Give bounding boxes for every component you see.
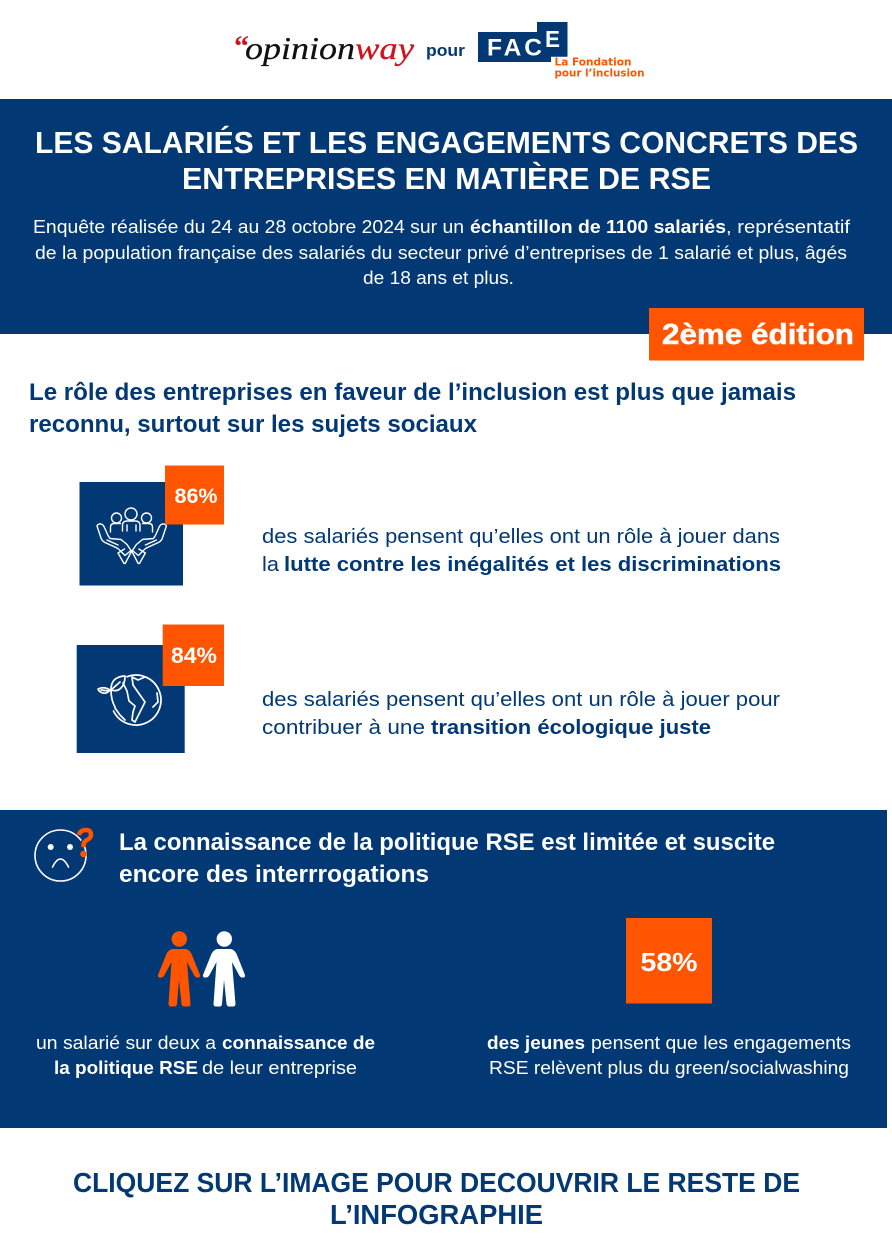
title: LES SALARIÉS ET LES ENGAGEMENTS CONCRETS DES	[35, 125, 858, 160]
text block: survey method: de la population française des salariés du secteur privé d’entreprises de 1 salarié et plus, âgés	[35, 242, 847, 263]
badge: 2ème édition: 2ème édition	[662, 319, 854, 351]
text block: one in two employees: connaissance de	[222, 1032, 375, 1053]
title: ENTREPRISES EN MATIÈRE DE RSE	[182, 161, 711, 196]
logo: FACE: La Fondation	[554, 56, 632, 68]
icon: puzzled face	[35, 830, 91, 881]
badge: 86%	[165, 466, 224, 524]
logos: opinionway pour FACE	[234, 22, 644, 80]
badge: 58%: 58%	[640, 947, 698, 977]
text block: survey method	[33, 216, 851, 288]
text block: young people and greenwashing: pensent que les engagements	[591, 1032, 851, 1053]
text: pour: pour	[426, 42, 466, 60]
badge: 84%: 84%	[171, 643, 217, 668]
text block: survey method: Enquête réalisée du 24 au 28 octobre 2024 sur un	[33, 216, 464, 237]
title	[35, 125, 858, 196]
heading: knowledge is limited: La connaissance de la politique RSE est limitée et suscite	[119, 829, 775, 856]
text block: one in two employees: un salarié sur deux a	[36, 1032, 217, 1053]
text block: young people and greenwashing: RSE relèvent plus du green/socialwashing	[489, 1057, 849, 1078]
logo: opinionway	[234, 30, 415, 66]
logo: opinionway: way	[355, 30, 415, 66]
heading: role of companies	[29, 379, 796, 438]
text block: 84% statement: des salariés pensent qu’elles ont un rôle à jouer pour	[262, 688, 780, 711]
text block: 84% statement: contribuer à une	[262, 716, 425, 739]
icon: people in hands	[80, 482, 183, 586]
logo: FACE: pour l’inclusion	[554, 68, 644, 80]
badge: 58%	[626, 918, 712, 1004]
text block: one in two employees: de leur entreprise	[202, 1057, 357, 1078]
text block: 86% statement: lutte contre les inégalités et les discriminations	[284, 553, 781, 576]
icon: earth and leaf	[77, 645, 185, 753]
heading: role of companies: Le rôle des entreprises en faveur de l’inclusion est plus que jamais	[29, 379, 796, 406]
heading: knowledge is limited: encore des interrrogations	[119, 861, 429, 888]
text block: 86% statement: la	[262, 553, 280, 576]
text block: one in two employees	[36, 1032, 375, 1078]
text block: survey method: , représentatif	[726, 216, 851, 237]
logo: FACE	[478, 22, 644, 80]
badge: 2ème édition	[649, 308, 864, 360]
text block: 84% statement: transition écologique juste	[431, 716, 711, 739]
call to action: L’INFOGRAPHIE	[330, 1199, 543, 1230]
text block: survey method: échantillon de 1100 salariés	[470, 216, 726, 237]
badge: 86%: 86%	[174, 484, 218, 508]
logo: FACE: E	[545, 26, 560, 52]
text block: 86% statement	[262, 525, 781, 576]
heading: role of companies: reconnu, surtout sur les sujets sociaux	[29, 411, 478, 438]
text block: 86% statement: des salariés pensent qu’elles ont un rôle à jouer dans	[262, 525, 780, 548]
panel: knowledge of CSR policy	[0, 810, 887, 1128]
text block: 84% statement	[262, 688, 780, 739]
logo: opinionway: “	[234, 30, 249, 63]
panel: header banner	[0, 99, 892, 334]
text block: one in two employees: la politique RSE	[54, 1057, 198, 1078]
badge: 84%	[163, 624, 224, 686]
logo: FACE: FAC	[487, 34, 542, 62]
text block: young people and greenwashing	[487, 1032, 851, 1078]
call to action	[73, 1167, 800, 1230]
text block: survey method: de 18 ans et plus.	[363, 267, 514, 288]
call to action: CLIQUEZ SUR L’IMAGE POUR DECOUVRIR LE RESTE DE	[73, 1167, 800, 1198]
heading: knowledge is limited	[119, 829, 775, 888]
text block: young people and greenwashing: des jeunes	[487, 1032, 585, 1053]
logo: opinionway: opinion	[245, 30, 355, 66]
icon: two people, one highlighted	[158, 931, 245, 1006]
